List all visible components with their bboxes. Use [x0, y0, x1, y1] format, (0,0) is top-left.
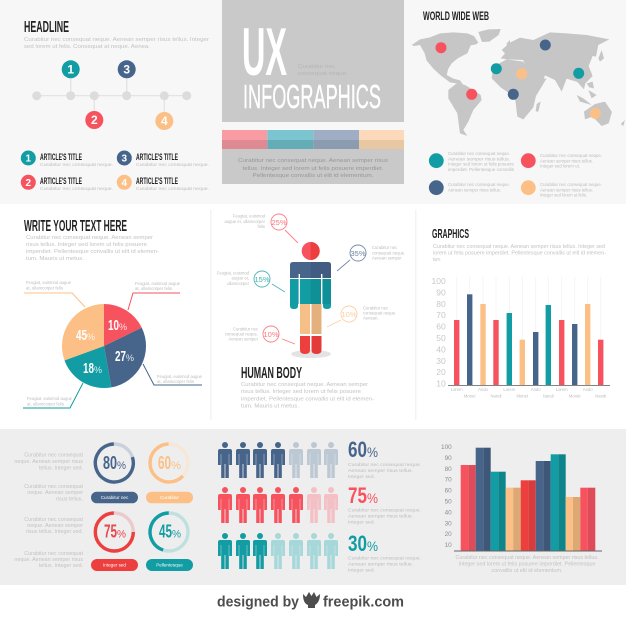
- callout labels: felis: [258, 224, 265, 229]
- pie labels: at, ullamcorper felis: [157, 379, 194, 384]
- legend: article titles: 4: [122, 178, 128, 189]
- panel: world wide web: [412, 9, 625, 198]
- timeline: [32, 60, 191, 130]
- ring: 75 percent: %: [117, 529, 126, 541]
- axis labels: 20: [445, 531, 452, 538]
- pie: 10: [108, 317, 119, 334]
- column chart: Ando: [583, 387, 593, 392]
- pie: 45: [76, 327, 87, 344]
- legend: article titles: ARTICLE'S TITLE: [40, 176, 82, 186]
- column chart: 50: [436, 333, 446, 343]
- panel: graphics column chart: [432, 227, 610, 398]
- intro text: Curabitur nec consequat neque. Aenean semper: [26, 235, 153, 241]
- axis labels: 80: [445, 466, 452, 473]
- body text: Curabitur nec consequat neque. Aenean semper: [241, 382, 368, 388]
- map legend: Integer sed lorem ut felis posuere: [448, 162, 515, 166]
- ring: 60 percent: [142, 436, 196, 490]
- pill buttons: [91, 492, 193, 571]
- ring texts: risus tellus.: [56, 496, 83, 502]
- stat: 30 percent: [348, 531, 421, 572]
- map legend: Aenean semper risus tellus.: [448, 188, 501, 192]
- pie: 27: [115, 348, 126, 365]
- column chart: Ando: [478, 387, 489, 392]
- map legend: [429, 151, 602, 198]
- timeline: 4: [161, 114, 168, 128]
- small caption: consequat neque.: [298, 71, 348, 77]
- pie: %: [94, 365, 102, 375]
- stat: 60 percent: Curabitur nec consequat neque.: [348, 462, 421, 467]
- stat: 75 percent: %: [367, 490, 378, 506]
- heading: write your text here: WRITE YOUR TEXT HERE: [24, 218, 127, 235]
- callout labels: Curabitur nec: [363, 306, 388, 310]
- pie labels: Feugiat, euismod augue: [135, 281, 181, 286]
- intro text: sed lorem ut felis. Consequat at neque. Aenea.: [24, 44, 150, 50]
- intro text: [26, 235, 159, 262]
- map legend: Aenean semper risus tellus.: [540, 188, 593, 192]
- panel: headline timeline: [21, 19, 209, 191]
- pie: %: [126, 353, 134, 363]
- pie: %: [87, 332, 95, 342]
- map legend: imperdiet. Pellentesque convallis: [448, 167, 514, 172]
- column chart: 20: [436, 367, 446, 377]
- axis labels: 70: [445, 477, 452, 484]
- callout labels: augue et,: [232, 276, 249, 280]
- text block: [222, 149, 404, 184]
- stat: 60 percent: 60: [348, 437, 367, 462]
- pill buttons: Integer sed: [103, 562, 126, 568]
- callout labels: Aenean semper: [372, 256, 402, 260]
- ring texts: neque. Aenean semper risus: [14, 459, 83, 465]
- panel: UX infographics title: [222, 0, 404, 184]
- ring texts: risus tellus. Integer sed.: [26, 529, 83, 535]
- figure: [290, 242, 331, 358]
- intro text: tum. Mauris ut metus.: [26, 256, 84, 262]
- title: infographics: INFOGRAPHICS: [243, 78, 381, 115]
- legend: article titles: Curabitur nec consequat neque.: [136, 186, 209, 191]
- legend: article titles: [21, 150, 209, 191]
- icon: freepik crown: [303, 592, 320, 608]
- panel: people pictograms: [218, 437, 421, 572]
- stat: 30 percent: Integer sed.: [348, 568, 375, 572]
- column chart: 60: [436, 322, 446, 332]
- bars: [454, 448, 602, 552]
- stat: 30 percent: Aenean semper risus tellus.: [348, 562, 413, 566]
- ring: 45 percent: [145, 508, 193, 556]
- world map: [412, 29, 625, 136]
- callout labels: consequat neque.: [363, 310, 396, 316]
- callout labels: [217, 214, 405, 342]
- axis labels: 30: [445, 520, 452, 527]
- callout labels: Aenean semper: [228, 336, 259, 342]
- pill buttons: Curabitur nec: [101, 495, 129, 500]
- ring texts: neque. Aenean semper: [27, 523, 83, 529]
- column chart: 10: [436, 379, 446, 389]
- body text: tum. Mauris ut metus.: [241, 404, 299, 410]
- pie: 18: [83, 360, 94, 377]
- stat: 30 percent: %: [367, 538, 378, 554]
- callout values: 10%: [341, 310, 357, 319]
- pie labels: at, ullamcorper felis: [135, 286, 172, 291]
- pie: [62, 304, 146, 388]
- column chart: 30: [436, 356, 446, 366]
- stat: 60 percent: [348, 437, 421, 479]
- pie labels: Feugiat, euismod augue: [26, 280, 72, 285]
- column chart: 100: [432, 276, 446, 286]
- ring texts: Curabitur nec consequat: [24, 452, 84, 458]
- column chart: [432, 276, 610, 398]
- panel: human body: [217, 214, 405, 410]
- intro text: lorem ut felis posuere imperdiet. Pellentesque convallis ut elit id elemen-: [433, 250, 606, 256]
- pie labels: at, ullamcorper felis: [27, 402, 64, 406]
- pie labels: Feugiat, euismod augue: [157, 374, 203, 379]
- column chart: Nandi: [543, 394, 554, 398]
- ring texts: Curabitur nec consequat: [24, 484, 84, 490]
- callout labels: Curabitur nec: [233, 326, 258, 332]
- chart caption: convallis ut elit id elementum.: [492, 568, 562, 574]
- callout labels: consequat neque.: [372, 250, 405, 256]
- colour strip: [222, 130, 404, 149]
- pie labels: Feugiat, euismod augue: [27, 396, 73, 401]
- chart caption: Integer sed lorem ut felis posuere imperdiet. Pellentesque: [458, 562, 596, 568]
- ring texts: tellus. Integer sed.: [39, 563, 83, 569]
- body text: risus tellus. Integer sed lorem ut felis posuere: [241, 389, 361, 395]
- intro text: Curabitur nec consequat neque. Aenean semper risus tellus. Integer sed: [433, 244, 605, 250]
- axis labels: 100: [441, 444, 452, 451]
- small caption: Curabitur nec: [298, 64, 335, 70]
- stat: 60 percent: Integer sed.: [348, 474, 375, 479]
- pill buttons: Curabitur: [160, 495, 179, 500]
- column chart: Monet: [569, 394, 581, 398]
- intro text: Curabitur nec consequat neque. Aenean semper risus tellus. Integer: [24, 37, 209, 43]
- legend: article titles: 2: [26, 178, 32, 189]
- body text: imperdiet. Pellentesque convallis ut elit id elemen-: [241, 396, 374, 402]
- axis labels: [441, 444, 452, 549]
- ring texts: tellus. Integer sed.: [39, 466, 83, 472]
- credit: designed by freepik: designed by: [217, 594, 300, 610]
- stat: 60 percent: %: [367, 444, 378, 460]
- body text: [241, 382, 374, 410]
- credit: designed by freepik: [217, 592, 404, 610]
- axis labels: 50: [445, 498, 452, 506]
- stat: 75 percent: Curabitur nec consequat neque.: [348, 508, 421, 512]
- callout labels: augue et, ullamcorper: [224, 219, 266, 224]
- column chart: Nandi: [491, 394, 502, 398]
- chart caption: [456, 555, 598, 574]
- map legend: Curabitur nec consequat neque.: [540, 182, 602, 187]
- ring texts: Curabitur nec consequat: [24, 517, 84, 523]
- timeline: 3: [123, 62, 130, 76]
- ring texts: neque. Aenean semper: [27, 490, 83, 496]
- ring texts: neque. Aenean semper risus: [14, 557, 83, 563]
- axis labels: 60: [445, 488, 452, 495]
- column chart: 80: [436, 299, 446, 309]
- stat: 75 percent: Integer sed.: [348, 520, 375, 524]
- panel: progress rings: [14, 436, 196, 571]
- intro text: [433, 244, 606, 263]
- stat: 75 percent: 75: [348, 483, 367, 508]
- callout labels: Feugiat, euismod: [217, 270, 250, 276]
- ring: 75 percent: 75: [104, 522, 117, 542]
- heading: world wide web: WORLD WIDE WEB: [423, 9, 489, 23]
- callout values: 35%: [350, 249, 366, 258]
- callout labels: Curabitur nec: [372, 245, 397, 250]
- intro text: risus tellus. Integer sed lorem ut felis posuere: [26, 242, 147, 248]
- stat: 60 percent: Aenean semper risus tellus.: [348, 468, 413, 473]
- pill buttons: Pellentesque: [156, 562, 183, 568]
- people row teal: [218, 533, 338, 569]
- ring: 80 percent: 80: [103, 453, 117, 473]
- pie: %: [119, 322, 127, 332]
- axis labels: 10: [445, 542, 452, 549]
- people row navy: [218, 442, 338, 478]
- panel: pie chart: [23, 218, 203, 408]
- ring: 80 percent: [90, 439, 138, 487]
- panel: UX infographics title: UX: [242, 14, 287, 90]
- callout labels: consequat neque.: [225, 332, 258, 336]
- map legend: Integer sed lorem ut.: [540, 164, 580, 168]
- pie labels: [26, 280, 203, 406]
- map legend: Aenean semper risus tellus.: [448, 156, 510, 162]
- legend: article titles: 1: [26, 154, 32, 164]
- panel: bottom band: [0, 429, 626, 585]
- panel: grouped bar chart: [441, 444, 602, 574]
- map legend: Aenean semper risus tellus.: [540, 158, 593, 164]
- column chart: Lorem: [503, 387, 516, 392]
- legend: article titles: ARTICLE'S TITLE: [136, 176, 178, 186]
- ring: 80 percent: %: [117, 460, 126, 472]
- text block: tellus. Integer sed lorem ut felis posuere imperdiet.: [242, 166, 384, 172]
- credit: designed by freepik: freepik.com: [323, 594, 404, 610]
- column chart: 40: [436, 344, 446, 354]
- callout values: 25%: [271, 218, 287, 227]
- timeline: 1: [67, 62, 74, 76]
- column chart: Monet: [464, 394, 476, 398]
- intro text: [24, 37, 209, 50]
- pie leaders: [23, 293, 202, 408]
- small caption: [298, 64, 348, 77]
- map legend: Curabitur nec consequat neque.: [540, 153, 602, 158]
- legend: article titles: 3: [122, 154, 128, 164]
- legend: article titles: Curabitur nec consequat neque.: [40, 186, 113, 191]
- map legend: Curabitur nec consequat neque.: [448, 151, 510, 156]
- text block: Curabitur nec consequat neque. Aenean semper risus: [238, 158, 388, 164]
- heading: human body: HUMAN BODY: [241, 365, 302, 382]
- callout values: 10%: [263, 330, 279, 339]
- ring: 45 percent: 45: [159, 522, 172, 542]
- pie labels: at, ullamcorper felis: [26, 286, 63, 290]
- callout labels: ullamcorper: [227, 281, 250, 286]
- chart caption: Curabitur nec consequat neque. Aenean semper risus tellus.: [456, 555, 598, 561]
- stat: 75 percent: Aenean semper risus tellus.: [348, 514, 413, 518]
- heading: graphics: GRAPHICS: [432, 227, 469, 241]
- column chart: Monet: [516, 394, 529, 398]
- column chart: 70: [436, 310, 446, 320]
- stat: 75 percent: [348, 483, 421, 524]
- legend: article titles: Curabitur nec consequat neque.: [136, 162, 209, 167]
- axis labels: 40: [445, 509, 452, 516]
- callout values: [254, 218, 366, 339]
- intro text: tum.: [433, 257, 441, 263]
- column chart: Lorem: [451, 387, 463, 392]
- callouts: [254, 214, 366, 344]
- callout labels: Feugiat, euismod: [233, 214, 266, 218]
- axis labels: 90: [445, 455, 452, 462]
- callout labels: Aenean.: [363, 316, 379, 320]
- column chart: 90: [436, 287, 446, 297]
- column chart: Ando: [531, 387, 541, 392]
- stat: 30 percent: 30: [348, 531, 367, 556]
- ring: 60 percent: 60: [158, 453, 171, 473]
- ring: 60 percent: %: [171, 460, 181, 472]
- legend: article titles: Curabitur nec consequat neque.: [40, 162, 113, 167]
- heading: headline: HEADLINE: [24, 19, 69, 36]
- column chart: Nandi: [595, 394, 606, 398]
- ring texts: [14, 452, 84, 569]
- legend: article titles: ARTICLE'S TITLE: [136, 152, 178, 162]
- map legend: Curabitur nec consequat neque.: [448, 182, 510, 187]
- text block: Pellentesque convallis ut elit id elementum.: [252, 173, 374, 179]
- stat: 30 percent: Curabitur nec consequat neque.: [348, 556, 421, 560]
- ring: 75 percent: [95, 513, 133, 551]
- callout values: 15%: [254, 275, 270, 284]
- ring: 45 percent: %: [172, 529, 181, 541]
- intro text: imperdiet. Pellentesque convallis ut elit id elemen-: [26, 249, 159, 255]
- legend: article titles: ARTICLE'S TITLE: [40, 152, 82, 162]
- ring texts: Curabitur nec consequat: [24, 551, 84, 557]
- timeline: 2: [91, 113, 98, 127]
- column chart: Lorem: [556, 387, 568, 392]
- map legend: Integer sed lorem ut felis.: [540, 192, 587, 198]
- people row red: [218, 487, 338, 523]
